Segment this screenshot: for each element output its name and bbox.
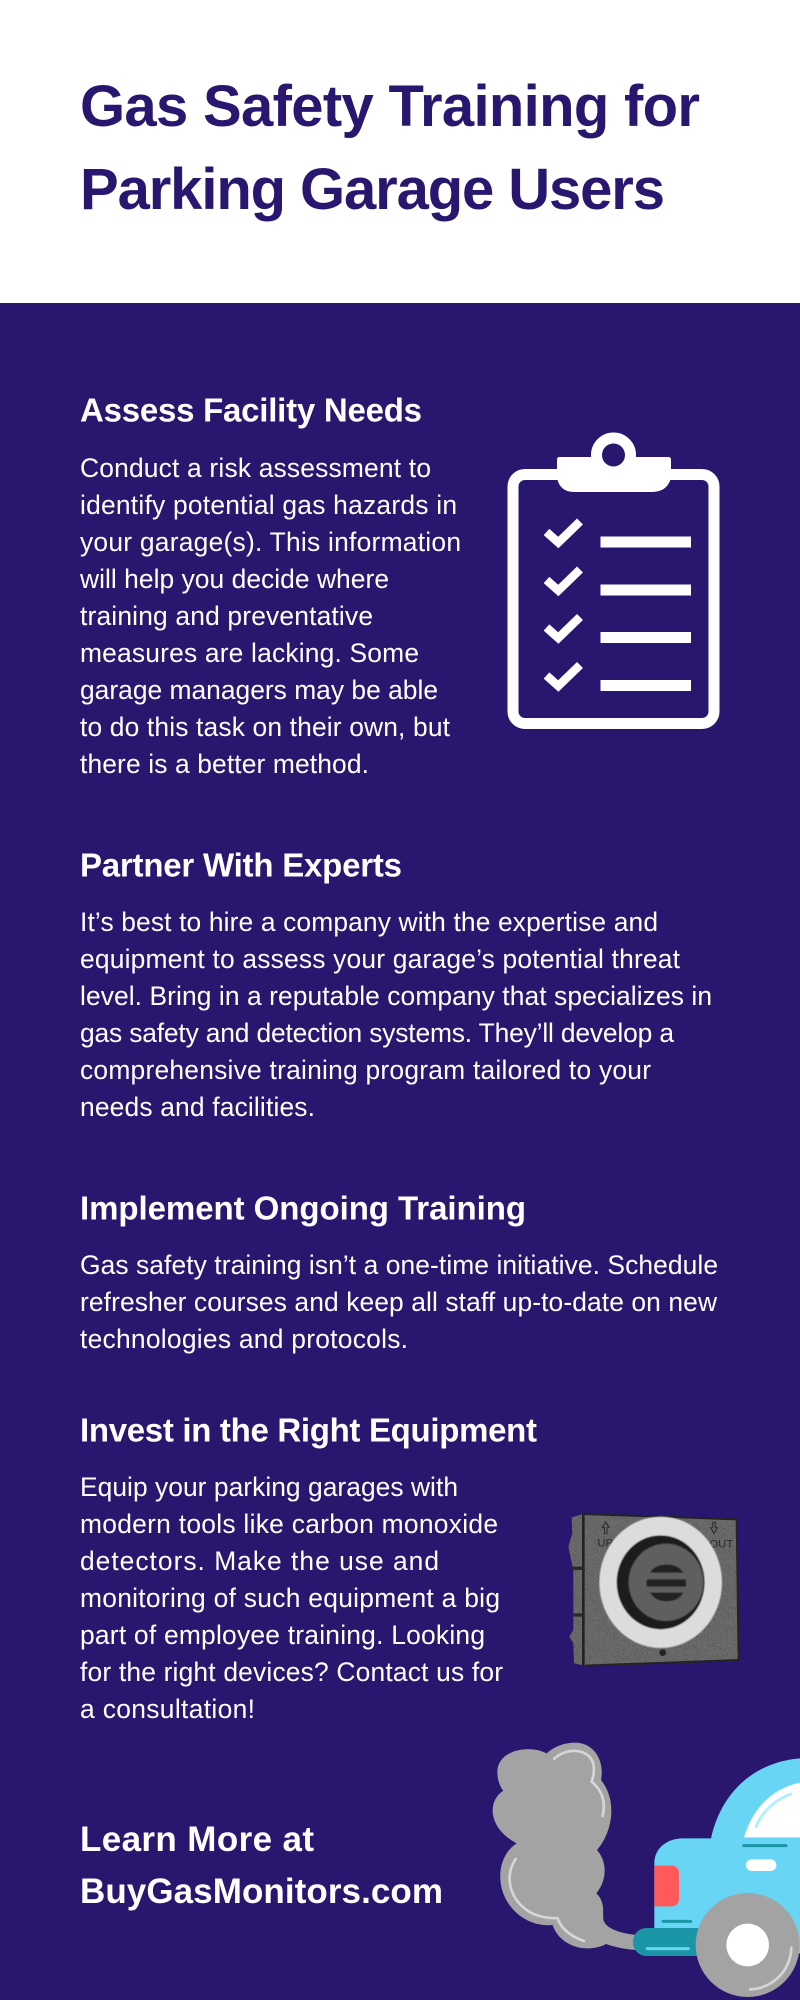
text block: partner with experts: It’s best to hire a company with the expertise and bbox=[80, 907, 658, 937]
text block: invest in the right equipment bbox=[80, 1472, 503, 1724]
text block: partner with experts: comprehensive training program tailored to your bbox=[80, 1055, 651, 1085]
text block: partner with experts: equipment to assess your garage’s potential threat bbox=[80, 944, 681, 974]
text block: assess facility needs: to do this task on their own, but bbox=[80, 712, 451, 742]
call to action: BuyGasMonitors.com bbox=[80, 1872, 443, 1911]
text block: partner with experts: level. Bring in a reputable company that specializes in bbox=[80, 981, 712, 1011]
text block: invest in the right equipment: Equip your parking garages with bbox=[80, 1472, 458, 1502]
text block: assess facility needs: there is a better method. bbox=[80, 749, 369, 779]
text block: invest in the right equipment: a consultation! bbox=[80, 1694, 255, 1724]
header panel bbox=[0, 0, 800, 303]
text block: assess facility needs: Conduct a risk assessment to bbox=[80, 453, 431, 483]
text block: implement ongoing training: Gas safety training isn’t a one-time initiative. Schedule bbox=[80, 1250, 718, 1280]
title: Parking Garage Users bbox=[80, 157, 665, 222]
text block: assess facility needs: your garage(s). This information bbox=[80, 527, 461, 557]
icon: carbon monoxide detector: OUT bbox=[709, 1538, 733, 1550]
heading: invest in the right equipment: Invest in the Right Equipment bbox=[80, 1412, 537, 1448]
text block: partner with experts bbox=[80, 907, 712, 1122]
panel: invest in the right equipment bbox=[80, 1412, 739, 1724]
heading: assess facility needs: Assess Facility Needs bbox=[80, 392, 422, 428]
panel: implement ongoing training bbox=[80, 1190, 718, 1354]
text block: assess facility needs: identify potential gas hazards in bbox=[80, 490, 457, 520]
heading: partner with experts: Partner With Experts bbox=[80, 846, 402, 884]
icon: carbon monoxide detector: UP bbox=[597, 1538, 613, 1550]
text block: assess facility needs: garage managers may be able bbox=[80, 675, 438, 705]
text block: partner with experts: gas safety and detection systems. They’ll develop a bbox=[80, 1018, 674, 1048]
text block: implement ongoing training: refresher courses and keep all staff up-to-date on new bbox=[80, 1287, 718, 1317]
panel: partner with experts bbox=[80, 846, 712, 1122]
text block: invest in the right equipment: part of employee training. Looking bbox=[80, 1620, 485, 1650]
text block: implement ongoing training bbox=[80, 1250, 718, 1354]
text block: assess facility needs bbox=[79, 453, 461, 779]
text block: invest in the right equipment: monitoring of such equipment a big bbox=[80, 1583, 500, 1613]
title: Gas Safety Training for bbox=[80, 74, 700, 139]
heading: implement ongoing training: Implement Ongoing Training bbox=[80, 1190, 526, 1226]
wheel bbox=[696, 1893, 800, 1997]
text block: implement ongoing training: technologies and protocols. bbox=[80, 1324, 408, 1354]
text block: invest in the right equipment: for the right devices? Contact us for bbox=[80, 1657, 503, 1687]
exhaust smoke bbox=[493, 1743, 640, 1950]
text block: invest in the right equipment: detectors. Make the use and bbox=[80, 1546, 439, 1576]
call to action: Learn More at bbox=[80, 1820, 314, 1859]
text block: assess facility needs: will help you decide where bbox=[79, 564, 389, 594]
icon: car with exhaust smoke bbox=[493, 1743, 800, 1997]
text block: partner with experts: needs and facilities. bbox=[80, 1092, 315, 1122]
title bbox=[80, 74, 700, 222]
icon: carbon monoxide detector bbox=[568, 1514, 739, 1666]
text block: assess facility needs: training and preventative bbox=[80, 601, 373, 631]
car body bbox=[633, 1758, 800, 1956]
text block: invest in the right equipment: modern tools like carbon monoxide bbox=[80, 1509, 498, 1539]
icon: clipboard checklist bbox=[513, 438, 714, 724]
panel: assess facility needs bbox=[79, 392, 714, 779]
call to action bbox=[80, 1820, 443, 1911]
text block: assess facility needs: measures are lacking. Some bbox=[80, 638, 419, 668]
